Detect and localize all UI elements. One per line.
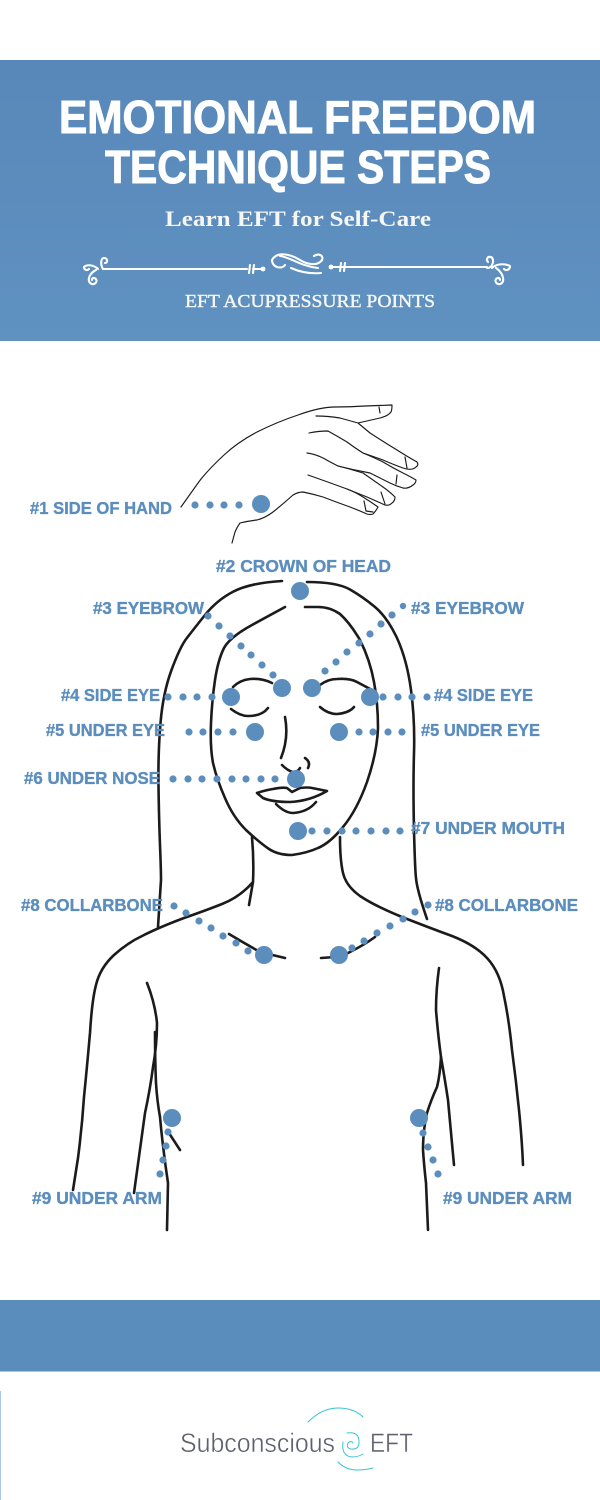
point 5: under eye left xyxy=(185,723,264,741)
right torso xyxy=(423,1057,441,1230)
section heading: EFT ACUPRESSURE POINTS xyxy=(185,291,435,311)
ornamental divider xyxy=(84,254,510,284)
title: EMOTIONAL FREEDOM xyxy=(59,91,536,143)
label: crown of head: #2 CROWN OF HEAD xyxy=(216,556,391,576)
point 5: under eye right xyxy=(330,723,406,741)
neck and left shoulder xyxy=(73,837,253,1190)
right inner arm xyxy=(436,968,454,1165)
title xyxy=(59,91,536,193)
label: collarbone right: #8 COLLARBONE xyxy=(435,895,578,915)
closed eyes xyxy=(231,707,354,716)
point 4: side eye left xyxy=(164,688,240,706)
lips xyxy=(257,788,327,813)
tapping point markers xyxy=(156,495,442,1178)
label: side eye right: #4 SIDE EYE xyxy=(434,685,533,705)
point 3: eyebrow right xyxy=(303,603,406,697)
illustration: head, face and body line art xyxy=(73,581,523,1230)
left torso xyxy=(155,1032,180,1230)
eyebrows xyxy=(233,679,372,690)
logo wordmark: Subconscious xyxy=(180,1428,335,1458)
point 8: collarbone left xyxy=(170,902,273,964)
label: under arm left: #9 UNDER ARM xyxy=(32,1188,162,1208)
nose xyxy=(281,717,309,772)
panel: header band xyxy=(0,60,600,341)
point 7: under mouth xyxy=(289,822,404,840)
collarbones xyxy=(229,934,375,958)
label: under eye right: #5 UNDER EYE xyxy=(421,720,540,740)
label: eyebrow right: #3 EYEBROW xyxy=(411,598,524,618)
illustration: hand line art xyxy=(181,405,418,543)
icon: teal spiral xyxy=(308,1408,373,1470)
label: eyebrow left: #3 EYEBROW xyxy=(93,598,204,618)
face outline xyxy=(211,607,378,855)
point 4: side eye right xyxy=(361,688,431,706)
footer band xyxy=(0,1300,600,1372)
neck and right shoulder xyxy=(340,837,523,1165)
left inner arm xyxy=(134,983,157,1193)
hair outline left xyxy=(158,581,282,927)
label: collarbone left: #8 COLLARBONE xyxy=(21,895,163,915)
logo: Subconscious EFT xyxy=(180,1408,413,1470)
point 8: collarbone right xyxy=(330,901,432,964)
label: under eye left: #5 UNDER EYE xyxy=(46,720,165,740)
point 9: under arm right xyxy=(410,1109,442,1178)
point 6: under nose xyxy=(169,770,305,788)
label: under arm right: #9 UNDER ARM xyxy=(443,1188,572,1208)
label: under mouth: #7 UNDER MOUTH xyxy=(411,818,565,838)
point 9: under arm left xyxy=(156,1109,181,1178)
point 1: side of hand xyxy=(191,495,270,513)
label: side of hand: #1 SIDE OF HAND xyxy=(30,498,172,518)
point 3: eyebrow left xyxy=(204,612,291,697)
hair outline right xyxy=(307,582,427,919)
labels: acupressure points xyxy=(21,498,578,1208)
label: under nose: #6 UNDER NOSE xyxy=(24,768,160,788)
page edge line xyxy=(0,1391,1,1500)
label: side eye left: #4 SIDE EYE xyxy=(61,685,160,705)
logo wordmark EFT: EFT xyxy=(370,1428,413,1458)
point 2: crown xyxy=(291,582,309,600)
subtitle: Learn EFT for Self-Care xyxy=(165,206,431,231)
title: TECHNIQUE STEPS xyxy=(105,141,491,193)
